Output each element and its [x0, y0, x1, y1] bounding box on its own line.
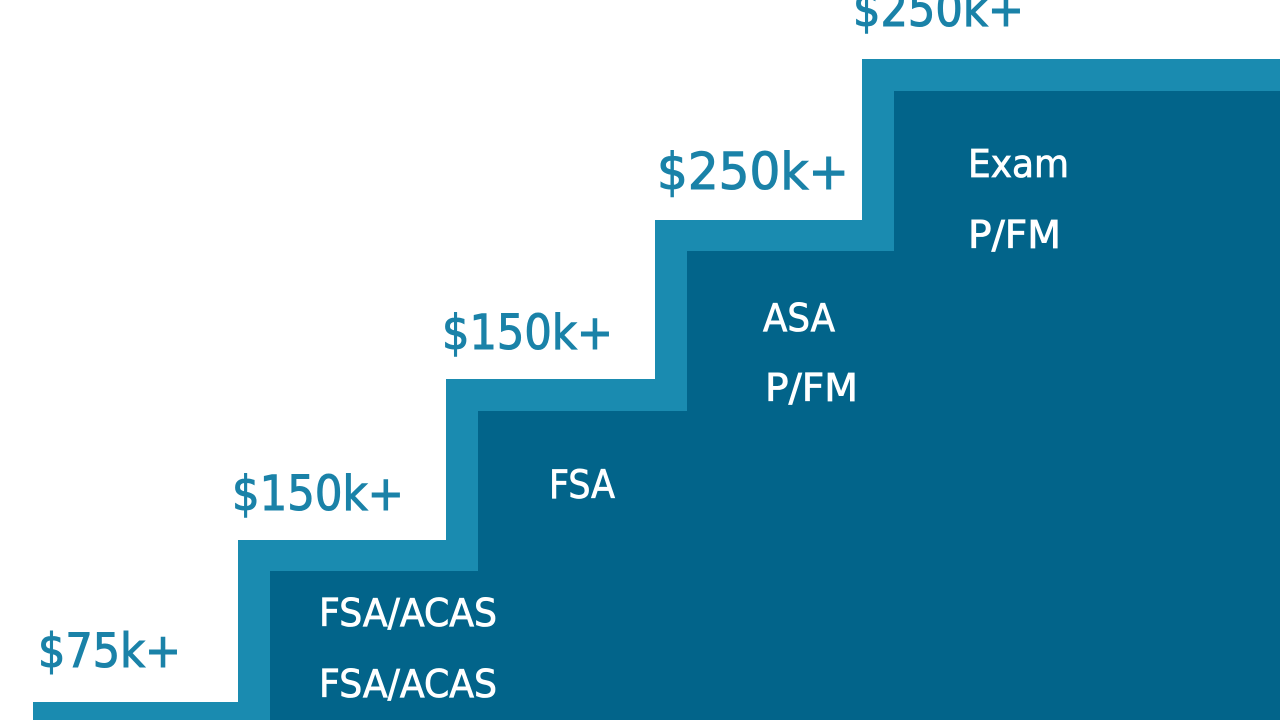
salary: step 1: $75k+	[38, 624, 181, 679]
label: FSA/ACAS upper: FSA/ACAS	[319, 591, 497, 635]
step 4 labels	[763, 296, 858, 410]
label: Exam: Exam	[968, 142, 1069, 186]
salary: step 2: $150k+	[232, 466, 404, 522]
step 3 label: FSA: FSA	[549, 463, 615, 508]
step 2 labels	[319, 591, 497, 706]
label: P/FM: P/FM	[765, 366, 858, 410]
label: FSA/ACAS lower: FSA/ACAS	[319, 662, 497, 706]
staircase inner fill	[270, 91, 1280, 720]
step 5 labels	[968, 142, 1069, 257]
label: P/FM: P/FM	[968, 213, 1061, 257]
salary: step 4: $250k+	[657, 143, 849, 202]
label: ASA: ASA	[763, 296, 835, 340]
salary: step 3: $150k+	[442, 305, 613, 361]
